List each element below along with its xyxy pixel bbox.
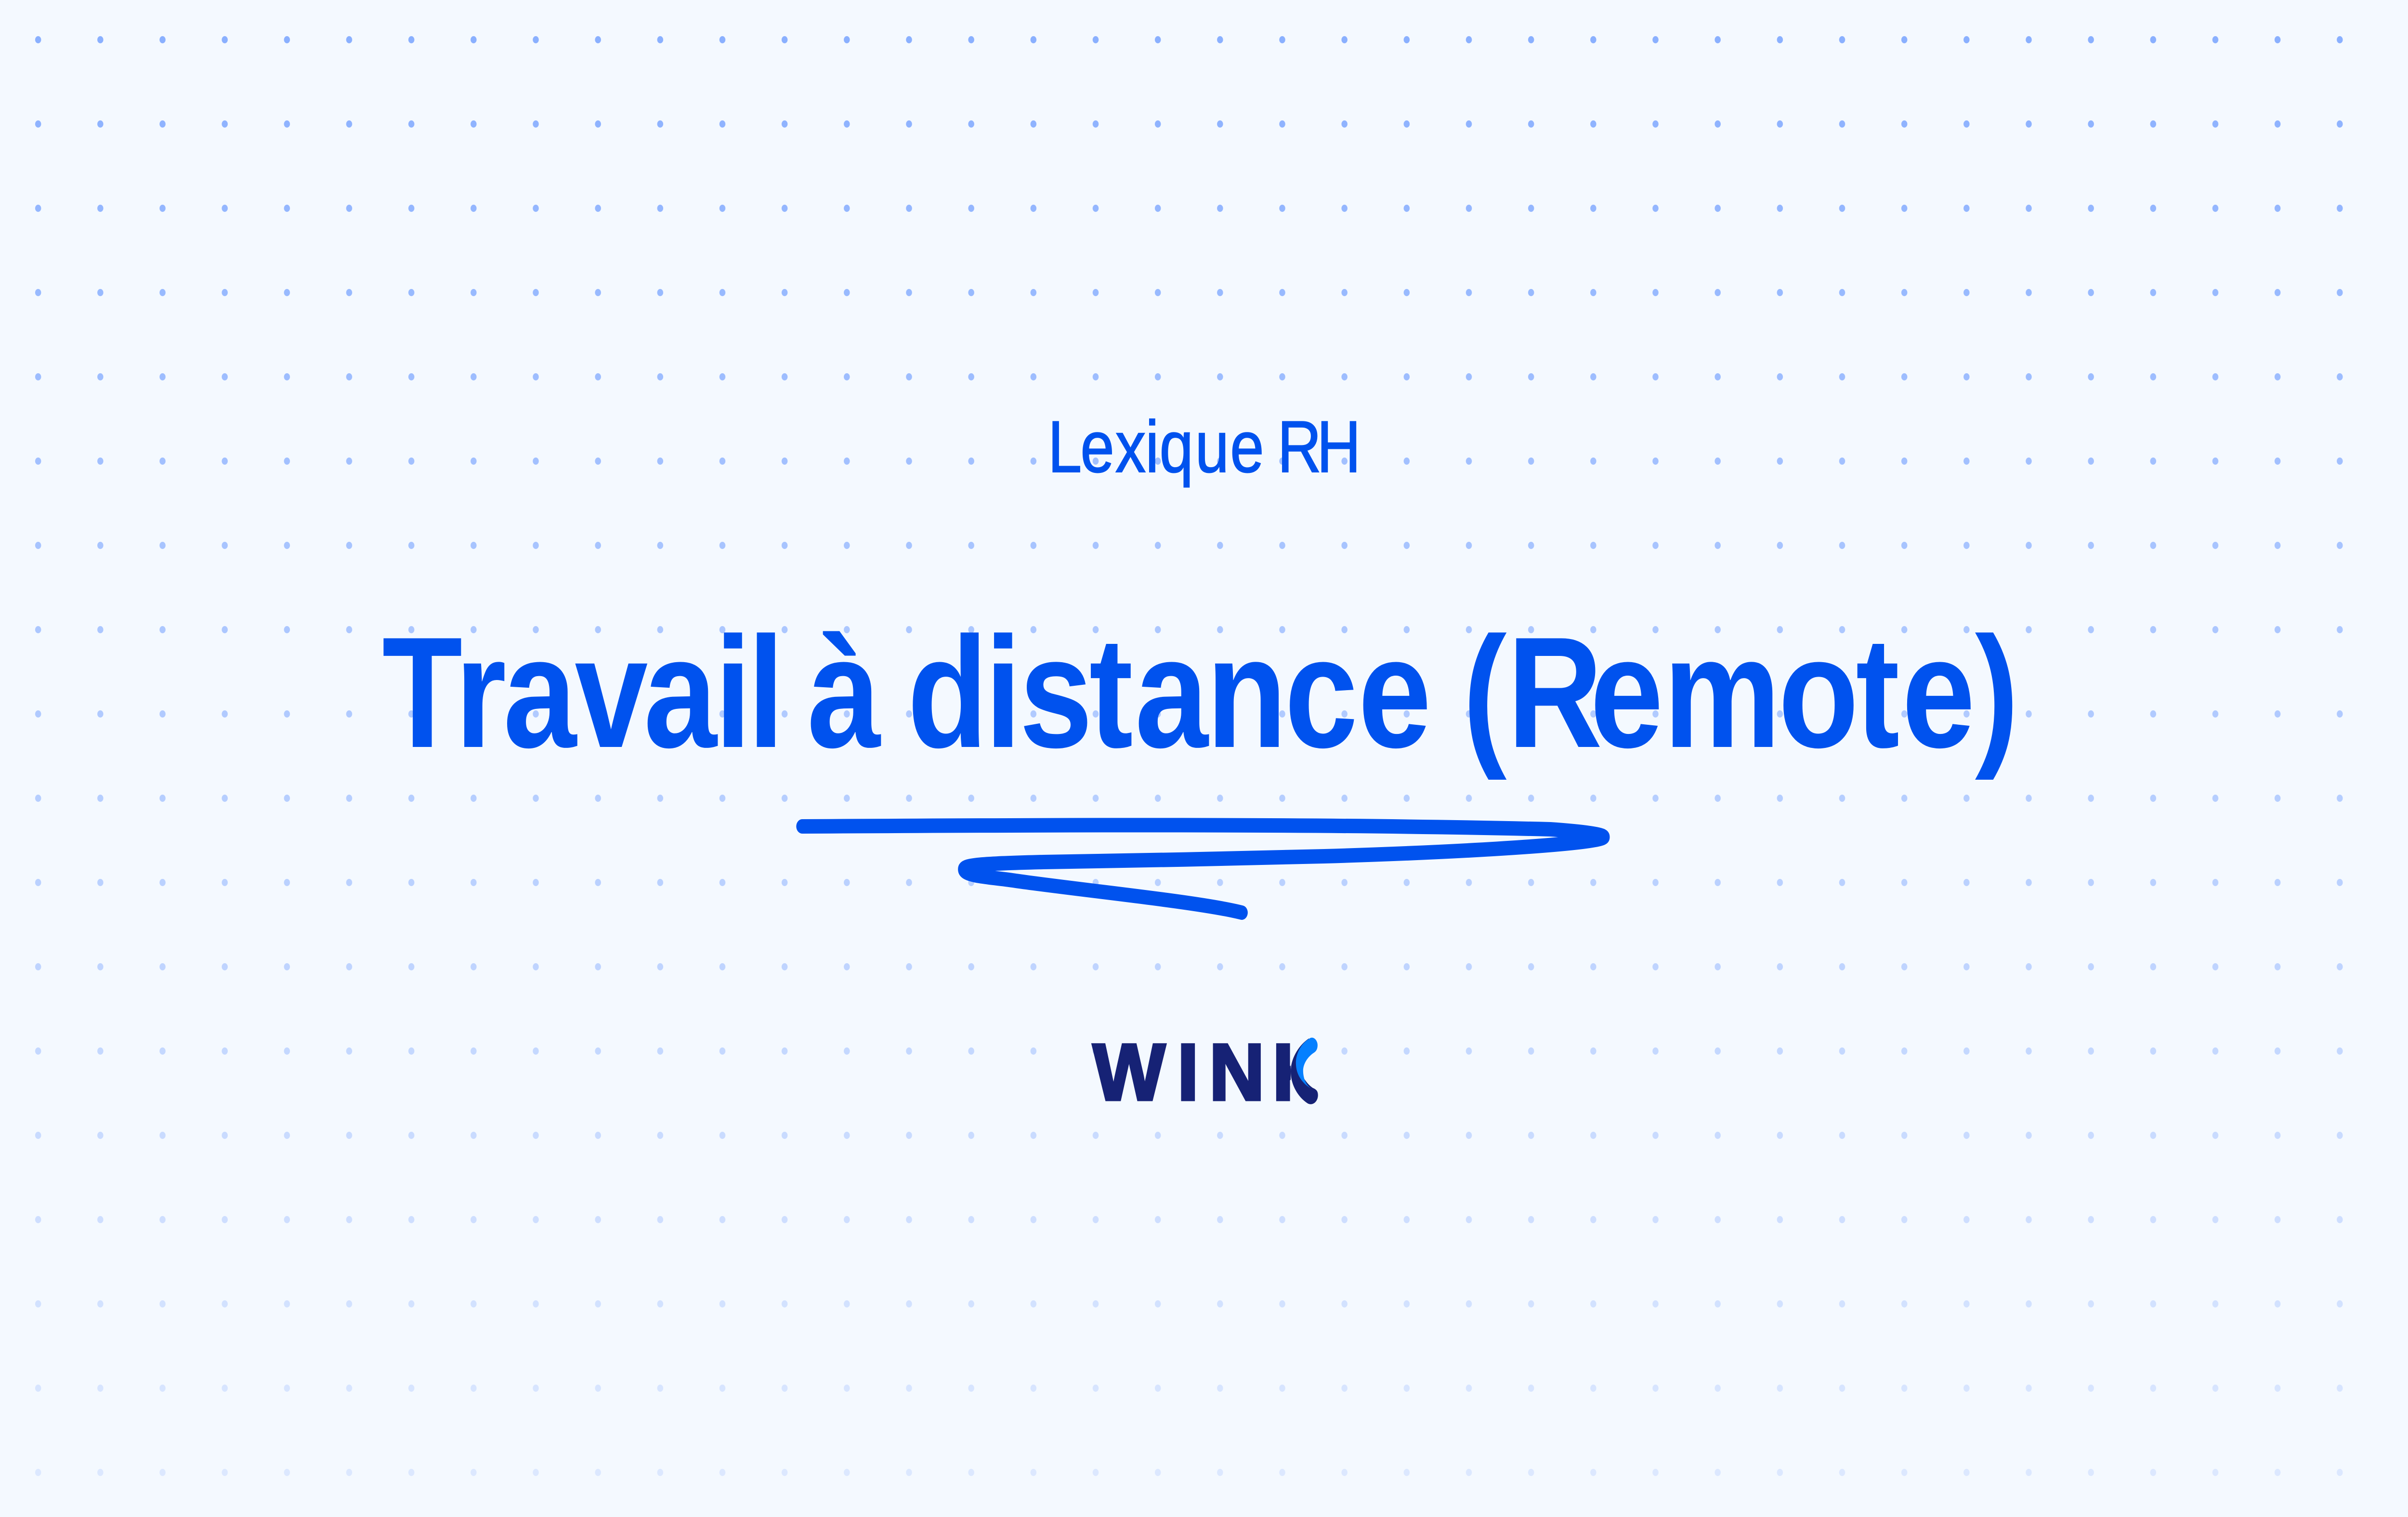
title: Travail à distance (Remote): Travail à distance (Remote) [382,604,2019,782]
subtitle: Lexique RH: Lexique RH [1048,405,1361,488]
logo mark: blue crescent [1296,1038,1318,1089]
logo: WINK [1091,1037,1318,1104]
logo mark: dark crescent [1291,1038,1318,1104]
logo wordmark: WINK [1093,1028,1328,1117]
hand-drawn underline scribble [802,825,1604,913]
